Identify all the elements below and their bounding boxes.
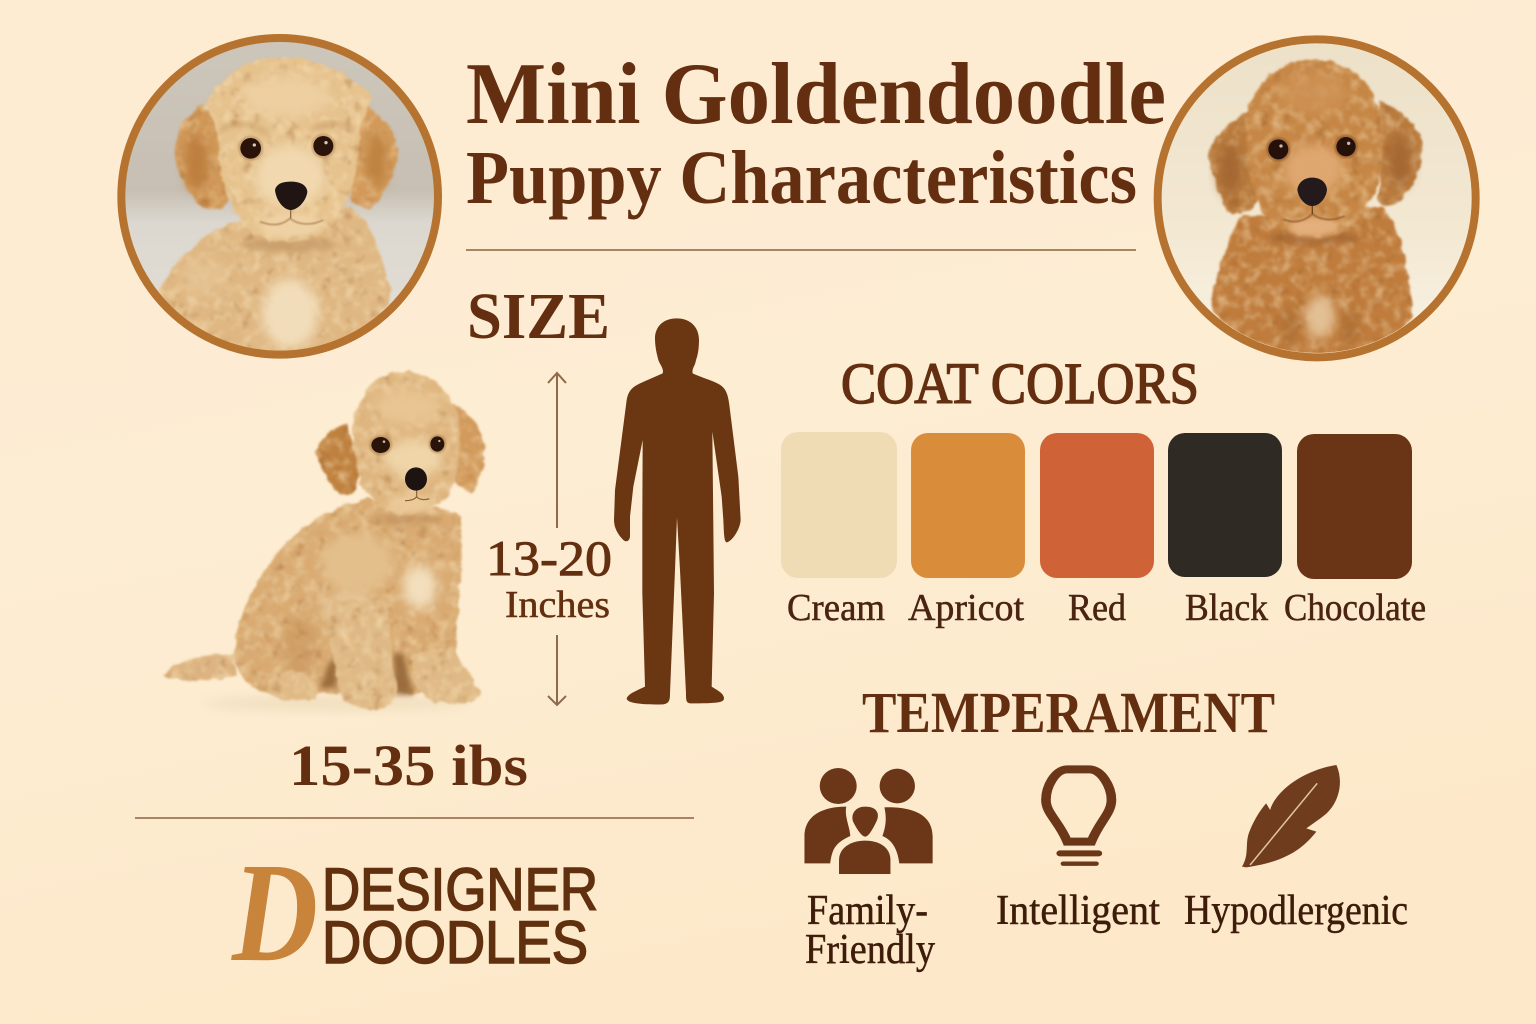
label: family-friendly: Family- <box>807 888 928 934</box>
title: Puppy Characteristics <box>466 136 1137 220</box>
icon: light bulb <box>1046 769 1111 864</box>
nose <box>275 182 307 210</box>
nose <box>1297 178 1327 206</box>
logo monogram: D <box>230 833 318 991</box>
photo: cream puppy portrait in circle <box>120 30 450 363</box>
title: Mini Goldendoodle <box>466 46 1166 143</box>
height value <box>486 530 612 626</box>
logo wordmark: DESIGNER <box>322 856 598 923</box>
swatch: red <box>1040 433 1154 629</box>
eye right <box>311 134 336 158</box>
lower left divider <box>135 817 694 819</box>
nose <box>405 467 427 491</box>
height value: Inches <box>505 584 610 626</box>
swatch: cream: Cream <box>787 587 885 629</box>
logo wordmark: DOODLES <box>322 909 588 976</box>
label: family-friendly: Friendly <box>805 927 935 973</box>
label: hypoallergenic: Hypodlergenic <box>1184 888 1408 934</box>
eye right <box>428 434 446 454</box>
title <box>466 46 1166 220</box>
heading: coat colors: COAT COLORS <box>841 351 1199 416</box>
label: intelligent: Intelligent <box>996 888 1160 934</box>
label: family-friendly <box>805 888 935 973</box>
logo wordmark <box>322 856 598 976</box>
swatch: apricot <box>908 433 1025 629</box>
icon: family <box>804 768 933 874</box>
swatch: apricot: Apricot <box>908 587 1024 629</box>
logo: designer doodles <box>230 833 598 991</box>
swatch: chocolate <box>1284 434 1426 629</box>
photo frame ring <box>121 38 438 355</box>
weight value: 15-35 ibs <box>289 733 528 798</box>
photo: red puppy portrait in circle <box>1150 30 1485 365</box>
height value: 13-20 <box>486 530 612 586</box>
eye left <box>369 435 392 455</box>
swatch: cream <box>781 432 897 629</box>
icon: feather <box>1242 765 1340 867</box>
icon: human silhouette <box>614 318 741 704</box>
swatch: black <box>1168 433 1282 629</box>
swatch: black: Black <box>1185 587 1268 629</box>
swatch: red: Red <box>1068 587 1126 629</box>
photo frame ring <box>1158 39 1476 357</box>
height arrow <box>548 373 566 705</box>
title divider <box>466 249 1136 251</box>
photo: sitting puppy <box>162 372 485 711</box>
heading: size: SIZE <box>467 280 610 353</box>
heading: temperament: TEMPERAMENT <box>862 680 1275 745</box>
swatch: chocolate: Chocolate <box>1284 587 1426 629</box>
eye left <box>1266 137 1291 162</box>
eye right <box>1334 135 1358 159</box>
eye left <box>238 136 263 161</box>
